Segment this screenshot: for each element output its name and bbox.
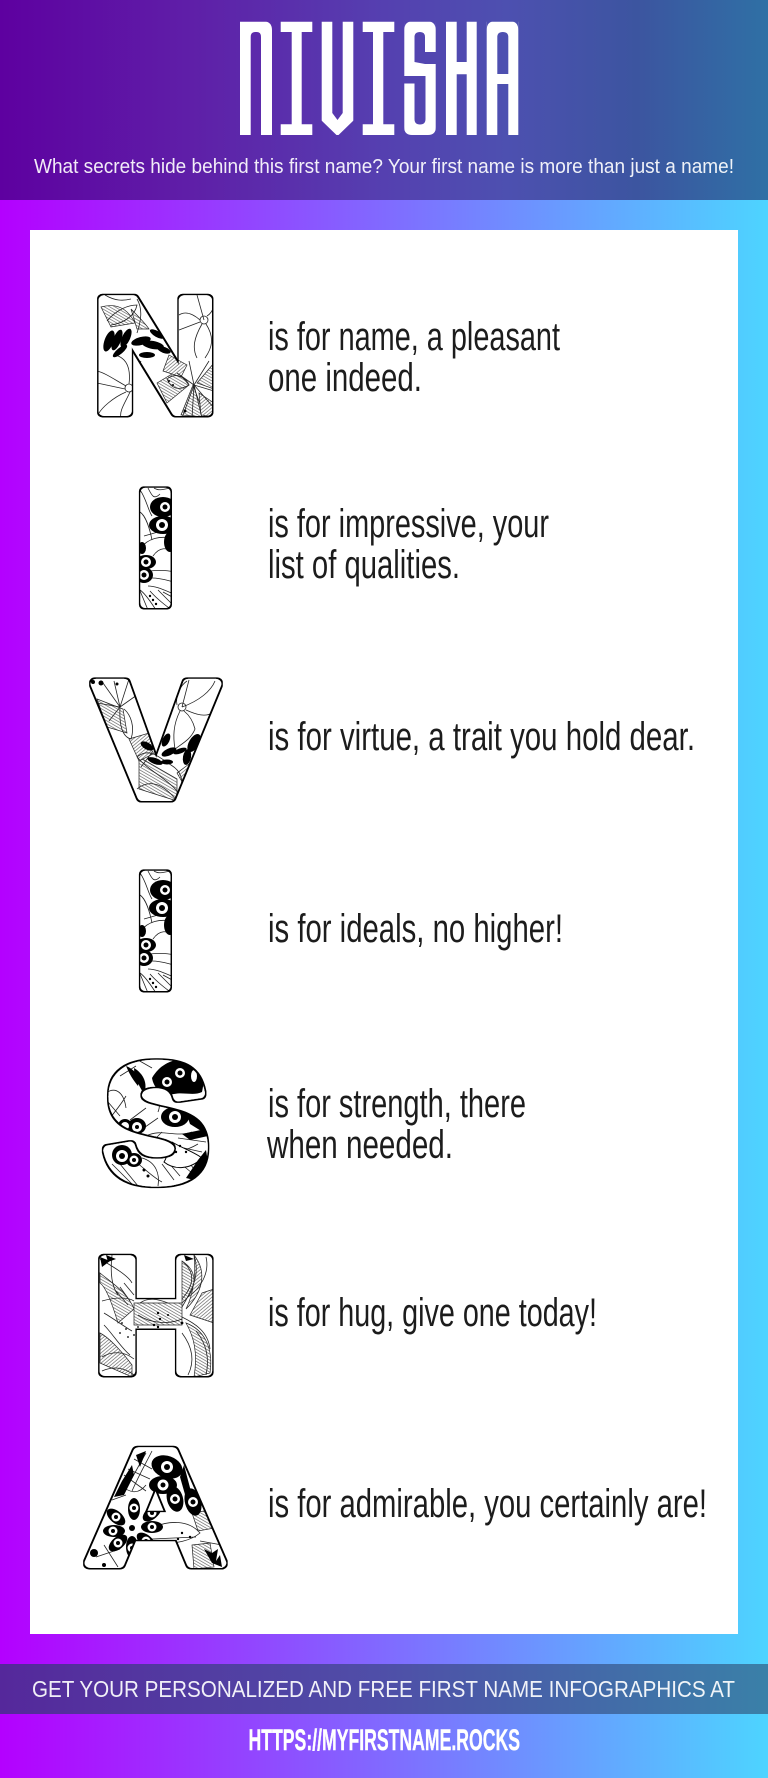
header band: [0, 0, 768, 200]
subtitle: What secrets hide behind this first name? Your first name is more than just a name!: [34, 155, 734, 178]
icon: patterned letter I: I: [135, 458, 176, 637]
icon: patterned letter N: N: [92, 266, 218, 446]
row: H: [93, 1226, 597, 1406]
footer url: HTTPS://MYFIRSTNAME.ROCKS: [248, 1724, 520, 1757]
icon: patterned letter S: S: [104, 1031, 209, 1215]
text: I line: is for ideals, no higher!: [268, 907, 563, 951]
text: I line: [268, 502, 549, 587]
icon: patterned letter V: V: [95, 648, 217, 831]
text: N line: [268, 315, 560, 400]
icon: patterned letter A: A: [86, 1418, 225, 1598]
icon: patterned letter H: H: [93, 1226, 218, 1406]
text: S line: [266, 1082, 526, 1167]
panel: white letters panel: [30, 230, 738, 1634]
text: N line: is for name, a pleasant: [268, 315, 560, 359]
row: N: [92, 266, 560, 446]
row: I: [135, 458, 549, 637]
title: [240, 22, 518, 135]
row: V: [95, 648, 695, 831]
icon: patterned letter I: I: [135, 841, 176, 1020]
text: S line: is for strength, there: [268, 1082, 526, 1126]
row: I second: [135, 841, 563, 1020]
footer band: [0, 1664, 768, 1714]
text: H line: is for hug, give one today!: [268, 1291, 597, 1335]
text: S line: when needed.: [266, 1123, 453, 1167]
row: A: [86, 1418, 707, 1598]
text: N line: one indeed.: [268, 356, 422, 400]
row: S: [104, 1031, 526, 1215]
text: I line: list of qualities.: [268, 543, 460, 587]
text: I line: is for impressive, your: [268, 502, 549, 546]
